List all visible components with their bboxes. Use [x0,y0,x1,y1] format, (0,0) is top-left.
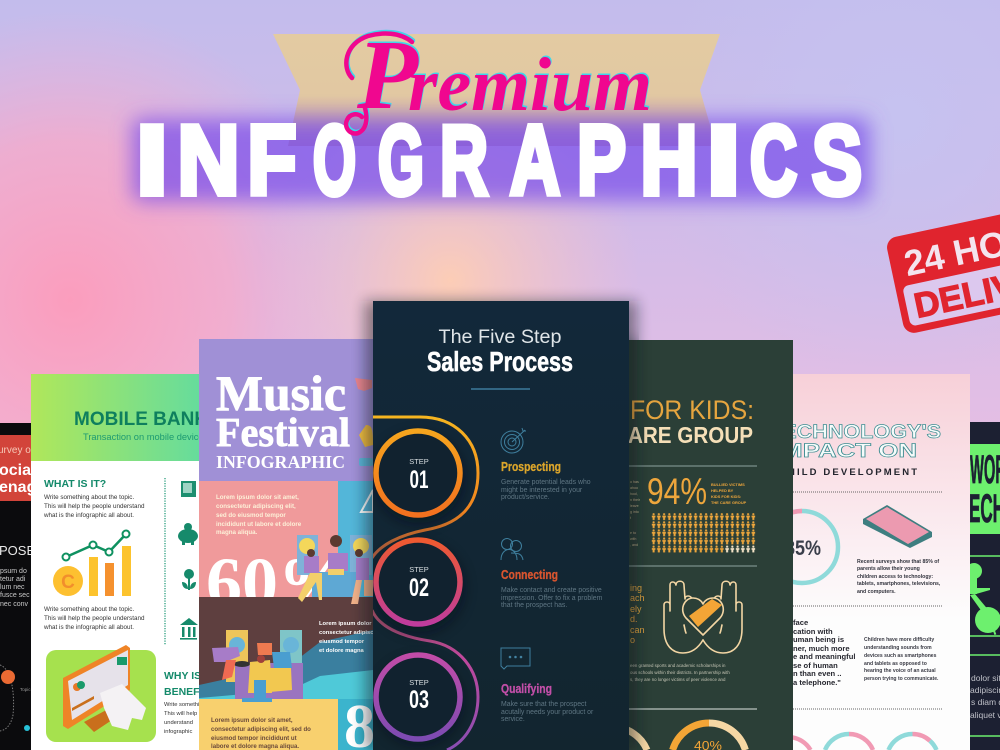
94 percent stat: 94% [647,471,707,512]
figure on bike [966,563,1000,635]
icon: bank [180,618,198,640]
green rules [970,556,1000,736]
step 03 [376,655,461,744]
red header [0,435,31,501]
step 1 text: Generate potential leads who [501,479,591,486]
stats text: tablets, smartphones, televisions, [857,581,941,587]
second text block: This will help the people understand [44,615,145,622]
step 01: STEP [409,457,429,466]
icon: chat bubble [501,648,530,669]
94 percent stat: HELPED BY [711,488,734,493]
quote: ner, much more [793,644,850,653]
yellow text block: eiusmod tempor incididunt ut [211,735,297,742]
bottom donuts [766,734,936,750]
panel: mobile banking: MOBILE BANKING [74,409,242,430]
step 1 text [501,459,591,501]
panel 5 shadow [622,340,636,750]
panel: technology impact [793,374,970,750]
divider lines [793,492,943,709]
orange side text: ing [630,583,642,593]
stats text: and computers. [857,589,896,595]
lavender title block: Festival [216,409,350,455]
lorem text on brown: eiusmod tempor [319,639,365,645]
orbit diagram [0,665,31,731]
small paragraph: s, they are no longer victims of peer violence and [630,677,726,682]
DJ illustration bottom [212,630,303,706]
outlined title [793,424,941,458]
purpose text: lum nec [0,584,25,591]
side text: and tablets as opposed to [864,661,927,667]
step 3 text: service. [501,716,525,723]
orange side text: o [630,635,635,645]
side text [630,480,641,547]
lavender title block: INFOGRAPHIC [216,452,345,472]
lorem text on brown: Lorem ipsum dolor sit [319,621,380,627]
what is it text: Write something about the topic. [44,494,134,501]
side text: g into [630,510,639,514]
lorem text on brown [319,621,373,653]
header band [31,374,199,461]
icon: phone [863,505,932,548]
people pictogram [651,513,756,554]
purpose text [0,546,31,606]
small paragraph: een granted sports and academic scholarships in [630,663,726,668]
outlined title: TECHNOLOGY'S [769,422,941,443]
quote: face [793,618,808,627]
step 2 text: Make contact and create positive [501,587,602,594]
60 percent: 60% [206,543,350,623]
pink lorem text: consectetur adipiscing elit, [216,503,296,510]
step 03: STEP [409,678,429,687]
side text: e to [630,531,636,535]
side text: hool, [630,492,638,496]
stats text: parents allow their young [857,566,920,572]
quote: uman being is [793,635,844,644]
icon: target [501,428,526,453]
quote: n than even .. [793,669,842,678]
94 percent stat: KIDS FOR KIDS: [711,494,741,499]
stats text: children access to technology: [857,574,933,580]
pink lorem text: incididunt ut labore et dolore [216,521,302,528]
outlined title: IMPACT ON [774,441,917,462]
quote [793,618,855,687]
donut charts [577,723,745,750]
icon: piggy bank [178,523,198,545]
94 percent stat: BULLIED VICTIMS [711,482,745,487]
panel shadow centre [365,301,637,750]
side text [864,637,939,682]
step 3 text: Make sure that the prospect [501,701,586,708]
side text: person trying to communicate. [864,676,939,682]
why is it beneficial: BENEFICIAL [164,686,228,698]
stats text [857,559,941,595]
title: Sales Process [427,346,573,377]
step 2 text [501,567,603,609]
title [427,327,573,377]
lavender title block [199,339,373,482]
second text block: Write something about the topic. [44,606,134,613]
step 3 text: acutally needs your product or [501,709,594,716]
ribbon banner [273,34,720,146]
orange side text: d. [630,614,638,624]
side text: Children have more difficulty [864,637,934,643]
yellow text block: labore et dolore magna aliqua. [211,743,299,750]
green card with monitor [46,645,156,742]
what is it text: WHAT IS IT? [44,478,106,490]
side text: t [630,516,631,520]
title: The Five Step [438,327,562,348]
heading: INFOGRAPHICS [136,105,862,215]
purpose text: psum do [0,568,27,575]
stats text: Recent surveys show that 85% of [857,559,939,565]
panel: workout dark [970,422,1000,750]
step 2 text: impression. Offer to fix a problem [501,595,603,602]
small paragraph [630,663,730,682]
orange side text [630,583,645,645]
heading: INFOGRAPHICS: A [510,105,560,215]
side text: devices such as smartphones [864,653,937,659]
step 02: STEP [409,565,429,574]
step 02 [375,540,463,632]
why is it beneficial: Write something [164,702,206,708]
why is it beneficial: This will help [164,711,197,717]
side text: understanding sounds from [864,645,932,651]
heading: INFOGRAPHICS: F [248,105,296,215]
purpose text: nec conv [0,601,29,608]
icon: people [501,538,523,560]
step 2 text: Connecting [501,567,558,582]
icon: plant [182,569,196,590]
side text: with [630,537,636,541]
step 3 text: Qualifying [501,681,552,696]
donut 85 percent: 85% [785,537,821,560]
orange side text: ach [630,593,645,603]
quote: cation with [793,627,833,636]
step 03: 03 [409,686,429,714]
pink lorem text: Lorem ipsum dolor sit amet, [216,494,299,501]
step 1 text: might be interested in your [501,487,583,494]
panel: social media dark: enag [0,479,36,496]
heading: INFOGRAPHICS: H [640,105,698,215]
side text: , and [630,543,638,547]
pink lorem text [216,494,302,536]
yellow text block [199,698,338,750]
panel: five step sales process [372,301,629,750]
subtitle: CHILD DEVELOPMENT [779,467,917,478]
brown block and waves [199,597,373,699]
heading: INFOGRAPHICS: R [440,105,488,215]
panel: kids care group [577,340,793,750]
heading: INFOGRAPHICS: I [136,105,168,215]
quote: se of human [793,661,838,670]
step 1 text: Prospecting [501,459,561,474]
what is it text [43,478,145,519]
icon: calculator [181,481,196,497]
heading: Premium [346,18,653,134]
step 01: 01 [410,466,429,494]
panel: mobile banking: Transaction on mobile devices [83,432,209,442]
heading: Premium: P [357,18,420,128]
donut 85 percent [793,508,840,586]
side text: leave [630,504,639,508]
heading: INFOGRAPHICS: I [706,105,740,215]
second text block [43,606,145,631]
orange side text: ely [630,604,642,614]
heading: INFOGRAPHICS: P [577,105,626,215]
pink lorem text: sed do eiusmod tempor [216,512,286,519]
bar and line chart [53,530,131,596]
panel: social media dark: ocial [0,462,35,479]
yellow text block: consectetur adipiscing elit, sed do [211,726,311,733]
heading: Premium: P [356,19,419,130]
icon: hands and heart [664,581,742,653]
heading: INFOGRAPHICS: S [812,105,862,215]
heading: INFOGRAPHICS: G [378,105,424,215]
side text: hearing the voice of an actual [864,668,936,674]
why is it beneficial [164,672,199,734]
pink lorem text: magna aliqua. [216,529,258,536]
lorem text on brown: consectetur adipiscing [319,630,383,636]
DJ illustration top [297,535,373,604]
why is it beneficial: understand [164,720,193,726]
panel: music festival [199,339,383,750]
purpose text: POSE [0,543,35,558]
heading glow [132,118,870,202]
purpose text: tetur adi [0,576,26,583]
quote: e and meaningful [793,652,855,661]
stamp: 24 hour delivery [885,189,1000,335]
step 3 text [501,681,594,723]
lorem text on brown: et dolore magna [319,648,365,654]
heading: INFOGRAPHICS: N [178,105,240,215]
why is it beneficial: WHY IS IT [164,670,214,682]
lavender title block: Music [216,365,346,421]
panel: mobile banking [31,374,199,750]
yellow text block: Lorem ipsum dolor sit amet, [211,717,293,724]
bar and line chart: C [61,572,75,593]
heading: INFOGRAPHICS: C [750,105,797,215]
step 02: 02 [409,574,429,602]
side text: o has [630,480,639,484]
orbit diagram: Topic [20,687,31,692]
purpose text: fusce sec [0,592,30,599]
title: ARE GROUP [628,422,753,448]
side text: ahoo [630,486,638,490]
quote: a telephone." [793,678,841,687]
green title block [969,444,1000,534]
second text block: what is the infographic all about. [43,624,134,631]
title [628,395,754,448]
heading: Premium: remium [409,42,653,126]
snake connector [372,417,478,750]
what is it text: This will help the people understand [44,503,145,510]
heading: Premium: remium [408,43,652,127]
step 2 text: that the prospect has. [501,602,567,609]
why is it beneficial: infographic [164,729,192,735]
what is it text: what is the infographic all about. [43,512,134,519]
pink and blue blocks [199,481,339,598]
side text: n their [630,498,641,502]
title: FOR KIDS: [630,395,754,425]
panel: social media dark [0,423,31,750]
94 percent stat: THE CARE GROUP [711,500,747,505]
orange side text: can [630,625,645,635]
heading: INFOGRAPHICS: O [313,105,356,215]
small paragraph: ous schools within their districts. In partnership with [630,670,730,675]
step 01 [375,431,463,523]
body text [970,673,1000,720]
step 1 text: product/service. [501,494,550,501]
